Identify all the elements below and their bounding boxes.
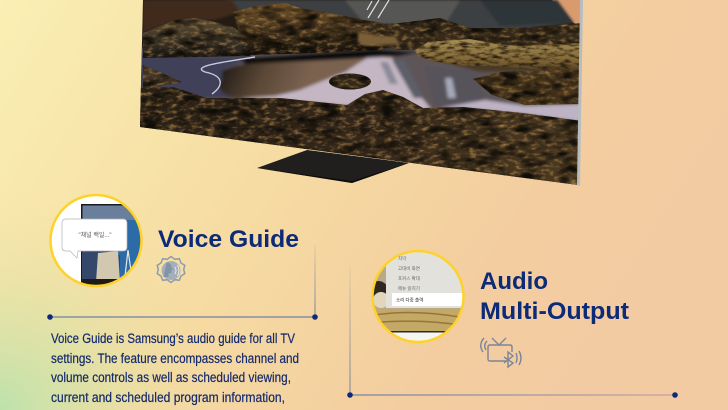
icon: voice guide gear	[157, 256, 185, 282]
body text: voice guide description: volume controls as well as scheduled viewing,	[51, 370, 291, 385]
body text: voice guide description: current and scheduled program information,	[51, 390, 285, 405]
panel frame: audio multi-output	[347, 265, 678, 398]
grass mound	[415, 39, 582, 71]
body text: voice guide description	[51, 331, 299, 405]
dark hill top left	[143, 0, 240, 32]
icon circle: audio multi-output menu screenshot: 고대비 화면	[398, 265, 420, 272]
water	[140, 48, 582, 126]
icon circle: voice guide screenshot	[49, 194, 143, 288]
foreground terrain	[138, 87, 582, 190]
water stream highlight	[201, 57, 255, 94]
mound left	[143, 65, 182, 90]
icon: TV with bluetooth	[481, 338, 521, 367]
lower mound right	[473, 70, 582, 105]
heading: Audio Multi-Output	[480, 268, 629, 325]
heading: Audio Multi-Output: Multi-Output	[480, 298, 629, 325]
heading: Audio Multi-Output: Audio	[480, 268, 548, 295]
body text: voice guide description: Voice Guide is Samsung’s audio guide for all TV	[51, 331, 295, 346]
landscape sky	[552, 0, 580, 24]
hill left	[143, 18, 255, 58]
mountain snow streaks	[367, 0, 389, 18]
icon: TV stand	[257, 150, 409, 183]
small mound	[358, 32, 400, 46]
icon circle: audio multi-output menu screenshot	[368, 248, 466, 346]
heading: Voice Guide: Voice Guide	[158, 226, 299, 253]
TV right edge	[577, 0, 583, 186]
rock in water	[329, 74, 371, 90]
speech bubble: "채널 백일..."	[78, 231, 112, 239]
icon circle: audio multi-output menu screenshot: 메뉴 읽히기	[398, 285, 420, 292]
icon circle: audio multi-output menu screenshot: 소리 다중 출력	[396, 296, 423, 304]
far hills right	[360, 18, 582, 50]
TV with landscape image	[138, 0, 584, 190]
landscape mountain	[227, 0, 576, 28]
icon circle: audio multi-output menu screenshot: 자막	[398, 255, 406, 262]
body text: voice guide description: settings. The feature encompasses channel and	[51, 351, 299, 366]
panel frame: voice guide	[47, 245, 318, 320]
icon circle: audio multi-output menu screenshot: 포커스 확대	[398, 275, 420, 282]
hill centre	[233, 3, 405, 55]
